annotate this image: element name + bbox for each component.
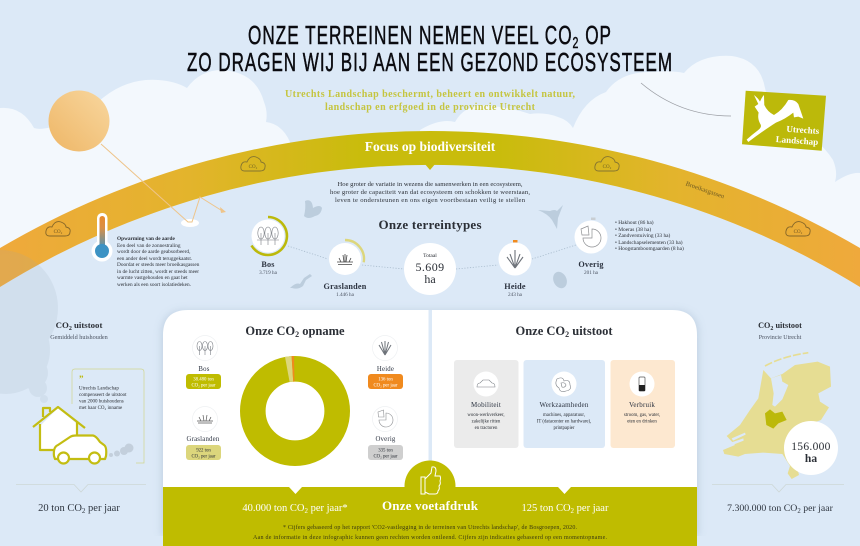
footnote: Aan de informatie in deze infographic kunnen geen rechten worden ontleend. Cijfers zijn indicaties gebaseerd op een momentopname. (253, 534, 608, 541)
text: global warming: warmte vastgehouden en gaat het (117, 275, 188, 281)
sun (48, 90, 110, 152)
card: Werkzaamheden: Werkzaamheden (539, 401, 589, 409)
panel shadow (161, 310, 699, 536)
icon: CO2 cloud far left: CO₂ (54, 230, 63, 235)
terrain: Overig: Overig (578, 260, 604, 269)
terrain: Overig (574, 218, 608, 276)
callout: households compensated: compenseert de uitstoot (79, 393, 127, 398)
item: Overig uptake: Overig (375, 436, 396, 443)
card: Verbruik: eten en drinken (627, 420, 657, 424)
title (187, 20, 673, 77)
item: Graslanden uptake: CO₂ per jaar (191, 454, 216, 460)
card: Werkzaamheden (524, 360, 605, 448)
list: other terrain types: • Moeras (38 ha) (615, 226, 651, 233)
province footer: 2 (797, 508, 801, 515)
terrain: Bos: 3.719 ha (259, 270, 278, 276)
logo: Utrechts Landschap: Utrechts (786, 124, 820, 136)
household footer: per jaar (85, 503, 120, 514)
intro text biodiversity: leven te ondersteunen en ons eigen voortbestaan veilig te stellen (335, 197, 526, 204)
title: ONZE TERREINEN NEMEN VEEL CO (248, 20, 739, 50)
text: global warming: Een deel van de zonnestraling (117, 243, 181, 249)
intro text biodiversity: Hoe groter de variatie in wezens die samenwerken in een ecosysteem, (338, 181, 523, 188)
province area badge: 156.000 (791, 441, 831, 453)
heading: onze CO2 opname: 2 (295, 330, 299, 339)
map: Netherlands (723, 353, 831, 479)
list: other terrain types: • Landschapselementen (33 ha) (615, 239, 683, 246)
title: OP (579, 20, 612, 50)
donut chart (253, 356, 337, 453)
intro text biodiversity: hoe groter de capaciteit van dat ecosysteem om schokken te weerstaan, (330, 189, 530, 196)
household footer (16, 484, 146, 515)
heading: onze CO2 uitstoot: Onze CO (515, 324, 565, 338)
heading: onze CO2 uitstoot: 2 (565, 330, 569, 339)
title: 2 (573, 35, 579, 52)
smoke shadows lower left (0, 250, 58, 403)
item: Bos uptake: 38.480 ton (193, 378, 214, 382)
province column heading: Provincie Utrecht (759, 335, 802, 341)
item: Graslanden uptake: Graslanden (187, 436, 220, 443)
province area badge: ha (805, 453, 817, 465)
terrain: Heide (498, 240, 532, 298)
terrain: Bos (252, 217, 287, 276)
heading: onze voetafdruk: Onze voetafdruk (382, 498, 479, 513)
terrain: total: Totaal (423, 253, 437, 259)
callout: households compensated: van 2000 huishoudens (79, 400, 124, 404)
item: Graslanden uptake (186, 406, 221, 460)
item: Heide uptake (368, 336, 403, 389)
footprint band (163, 460, 697, 546)
heading: onze CO2 opname: opname (299, 324, 345, 338)
item: Bos uptake: Bos (198, 366, 210, 373)
text: global warming: in de lucht zitten, wordt er steeds meer (117, 269, 199, 275)
icon: CO2 cloud right top: CO₂ (603, 165, 612, 170)
card: Verbruik: stroom, gas, water, (624, 413, 660, 418)
biodiversity arc band (0, 131, 860, 287)
item: Heide uptake: Heide (377, 366, 394, 373)
card: Werkzaamheden: machines, apparatuur, (543, 413, 585, 418)
province footer: 7.300.000 ton CO (727, 503, 797, 514)
icon: car smoke (109, 444, 134, 457)
icon: CO2 cloud left top: CO₂ (249, 165, 258, 170)
icon: CO2 cloud left top (241, 157, 265, 171)
sun ray arrow (101, 144, 226, 227)
card: Verbruik (610, 360, 675, 448)
household column heading: uitstoot (72, 320, 102, 330)
terrain: total: 5.609 (416, 260, 444, 274)
icon: thumbs up (421, 467, 440, 494)
greenhouse gases label: Broeikasgassen (685, 181, 726, 201)
callout: households compensated: ” (79, 374, 84, 384)
card: Mobiliteit: en tractoren (475, 426, 498, 431)
heading: onze terreintypes: Onze terreintypes (378, 217, 482, 232)
intro text biodiversity (330, 181, 530, 204)
household footer: 2 (82, 507, 86, 515)
uptake total: per jaar* (308, 503, 348, 514)
item: Overig uptake (368, 406, 403, 460)
animal silhouettes (290, 200, 569, 290)
heading: onze CO2 opname: Onze CO (245, 324, 295, 338)
logo pointer line (641, 83, 731, 116)
card: Mobiliteit: zakelijke ritten (472, 420, 501, 424)
subtitle (285, 89, 576, 113)
item: Overig uptake: CO₂ per jaar (373, 454, 398, 460)
household column heading: 2 (69, 326, 72, 332)
household column heading: CO (56, 320, 69, 330)
logo: Utrechts Landschap (742, 91, 826, 151)
household column heading: Gemiddeld huishouden (50, 334, 108, 341)
terrain: Graslanden: 1.446 ha (336, 292, 355, 298)
card: Mobiliteit (454, 360, 518, 448)
terrain: total: ha (424, 272, 436, 286)
card: Mobiliteit: Mobiliteit (471, 401, 501, 409)
logo: Utrechts Landschap: Landschap (775, 134, 819, 147)
dotted connectors (288, 245, 576, 269)
callout: households compensated: Utrechts Landschap (79, 386, 119, 392)
terrain: Bos: Bos (261, 260, 275, 269)
terrain: Heide: 243 ha (508, 292, 523, 298)
list: other terrain types (615, 219, 684, 252)
text: global warming: een ander deel wordt teruggekaatst. (117, 256, 192, 262)
list: other terrain types: • Zandverstuiving (33 ha) (615, 232, 671, 239)
icon: CO2 cloud far right: CO₂ (794, 230, 803, 235)
text: global warming: wordt door de aarde geabsorbeerd, (117, 249, 190, 255)
item: Heide uptake: 136 ton (378, 378, 393, 382)
card: Verbruik: Verbruik (629, 401, 655, 409)
province column heading: uitstoot (773, 321, 802, 330)
card: Mobiliteit: woon-werkverkeer, (467, 413, 505, 418)
province column heading: CO (758, 321, 770, 330)
footnote (253, 524, 608, 541)
panel: CO2 balance (163, 310, 697, 546)
icon: house and car (33, 407, 106, 464)
emissions total: 2 (571, 507, 575, 515)
callout: households compensated: met haar CO₂ inname (79, 406, 123, 411)
icon: CO2 cloud right top (595, 157, 619, 171)
terrain: total (404, 243, 456, 295)
province footer (712, 484, 844, 515)
clouds (0, 56, 860, 300)
province column heading: 2 (770, 326, 773, 332)
terrain: Heide: Heide (504, 282, 526, 291)
terrain: Graslanden (324, 240, 367, 298)
thermometer (92, 213, 112, 262)
area below the arc (0, 165, 860, 546)
household footer: 20 ton CO (38, 503, 82, 514)
province column heading (758, 321, 802, 341)
province footer: per jaar (801, 503, 834, 514)
heading: onze CO2 uitstoot: uitstoot (569, 324, 613, 338)
text: global warming: werken als een soort isolatiedeken. (117, 282, 191, 288)
text: global warming: Doordat er steeds meer broeikasgassen (117, 262, 200, 268)
subtitle: Utrechts Landschap beschermt, beheert en ontwikkelt natuur, (285, 89, 576, 100)
household column heading (50, 320, 108, 341)
list: other terrain types: • Hoogstamboomgaarden (8 ha) (615, 245, 684, 252)
terrain: Overig: 201 ha (584, 270, 599, 276)
text: global warming (117, 236, 200, 288)
terrain: Graslanden: Graslanden (324, 282, 367, 291)
text: global warming: Opwarming van de aarde (117, 236, 175, 242)
subtitle: landschap en erfgoed in de provincie Utrecht (325, 102, 536, 113)
province area badge (784, 421, 838, 475)
icon: CO2 cloud far right (786, 222, 810, 236)
item: Overig uptake: 335 ton (378, 448, 393, 454)
icon: CO2 cloud far left (46, 222, 70, 236)
emissions total: 125 ton CO (522, 503, 571, 514)
card: Werkzaamheden: printpapier (553, 426, 575, 431)
arc heading: Focus op biodiversiteit (365, 139, 496, 154)
list: other terrain types: • Hakhout (86 ha) (615, 219, 654, 226)
item: Bos uptake (186, 336, 221, 389)
footnote: * Cijfers gebaseerd op het rapport 'CO2-vastlegging in de terreinen van Utrechts landschap', de Bosgroepen, 2020. (283, 524, 578, 531)
emissions total: per jaar (574, 503, 609, 514)
uptake total: 2 (304, 507, 308, 515)
card: Werkzaamheden: IT (datacenter en hardware), (537, 420, 591, 424)
item: Graslanden uptake: 922 ton (196, 448, 211, 454)
uptake total: 40.000 ton CO (242, 503, 304, 514)
item: Bos uptake: CO₂ per jaar (191, 384, 216, 388)
callout: households compensated (72, 369, 144, 463)
item: Heide uptake: CO₂ per jaar (373, 384, 398, 388)
